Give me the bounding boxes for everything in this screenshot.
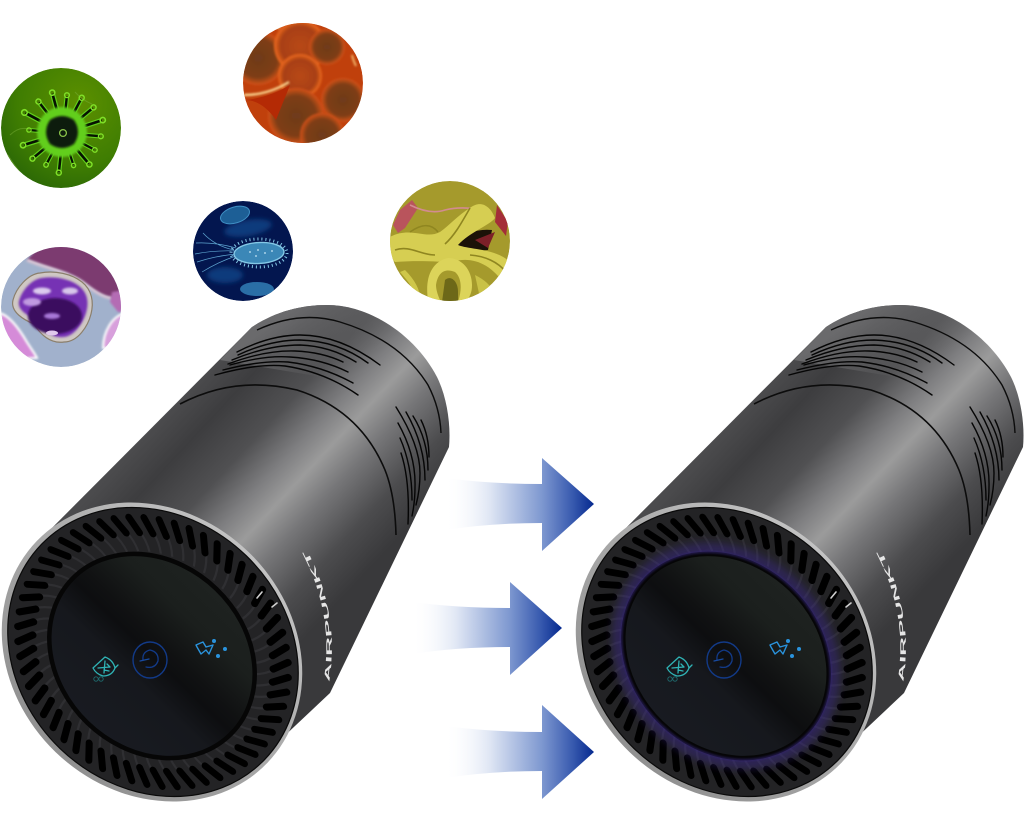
violet glow ring: [574, 505, 878, 807]
icon: green virus microbe: [1, 68, 121, 188]
arrow: bottom: [445, 705, 594, 799]
arrow: top: [445, 458, 594, 551]
brand label: AIRPUNKT: [302, 552, 332, 682]
icon: orange red blood cells: [243, 23, 363, 143]
icon: yellow bacteria cluster: [388, 181, 510, 305]
arrow: middle: [412, 582, 562, 675]
device: purifier after with glow (right): [576, 305, 1024, 802]
device: purifier before (left): [2, 305, 450, 802]
brand label: AIRPUNKT: [876, 552, 906, 682]
icon: blue bacteria: [193, 201, 293, 301]
icon: purple cell microbe: [0, 240, 125, 367]
